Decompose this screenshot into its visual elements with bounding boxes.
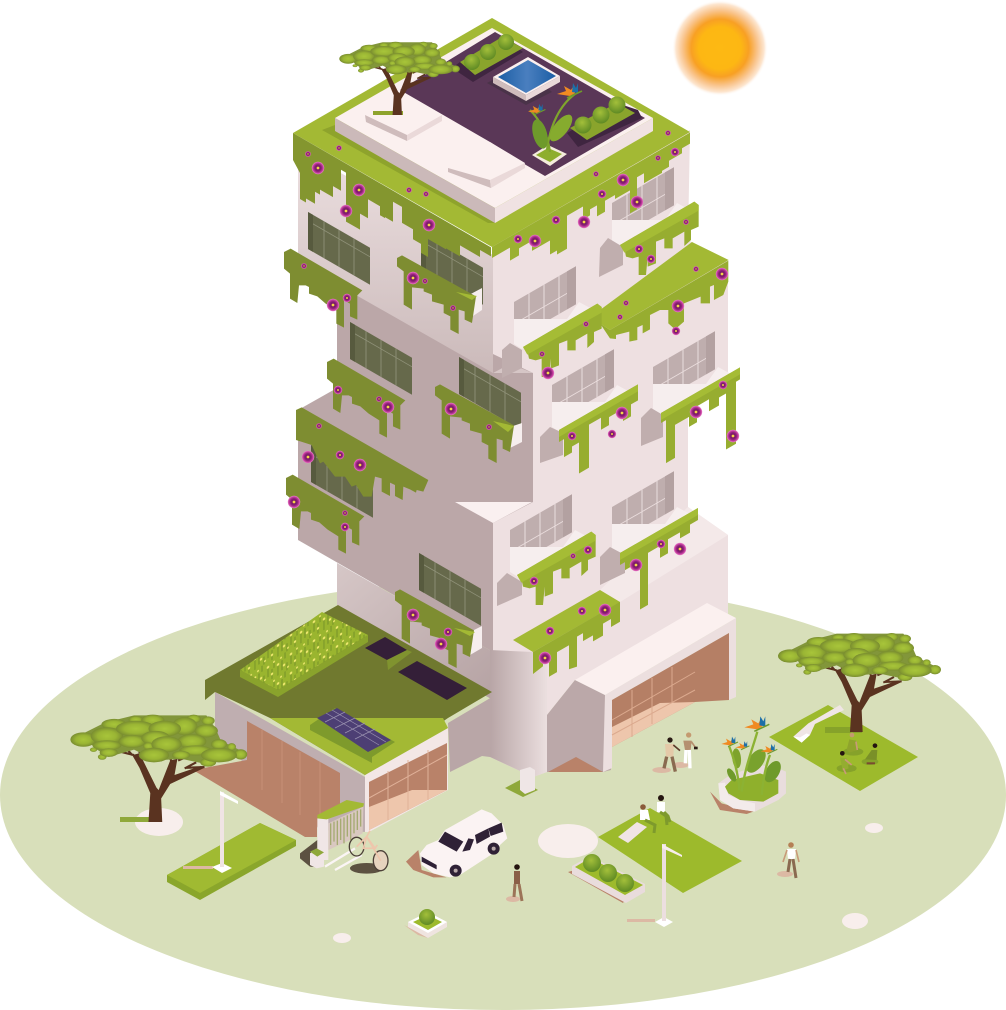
seated pair on central lawn <box>640 795 670 833</box>
right windows and balcony floors <box>510 167 733 577</box>
base wall <box>490 640 547 777</box>
annex brown glass and ground shadow <box>193 721 340 837</box>
roof left drape <box>293 133 491 309</box>
roof green surface <box>293 18 690 247</box>
garage floor <box>612 702 695 747</box>
green drapes left side <box>284 249 514 668</box>
low ledge drape <box>533 602 620 692</box>
garage entrance triangle <box>548 757 603 772</box>
balcony side walls <box>497 238 663 606</box>
right walls of the tower <box>490 130 728 777</box>
left wall top tier <box>298 150 493 373</box>
garage side wall <box>547 680 611 772</box>
roof bird of paradise plant <box>528 83 582 166</box>
bike rack with green wall <box>300 800 364 870</box>
round planter with bird of paradise <box>710 716 786 814</box>
roof planter back <box>452 34 523 82</box>
bright drape ends <box>456 292 477 300</box>
paved circles <box>333 823 883 943</box>
kiosk <box>505 767 538 797</box>
lower ledge top <box>600 507 728 602</box>
annex building <box>193 605 492 837</box>
garage roof <box>575 603 736 695</box>
group on right lawn <box>837 733 878 774</box>
annex roof dark <box>205 605 492 775</box>
bicycle <box>349 831 388 874</box>
bench on right lawn <box>793 705 844 743</box>
solar panel <box>310 708 395 763</box>
garage right frame <box>603 618 736 772</box>
annex gap wall <box>448 697 492 772</box>
walker left <box>506 864 522 902</box>
annex front face <box>365 728 448 832</box>
raised white box left <box>365 92 442 141</box>
green drapes right side <box>513 202 740 692</box>
left tree <box>70 715 247 836</box>
magenta flowers <box>288 130 739 664</box>
people <box>506 732 878 902</box>
lower balcony drape with long drip <box>620 508 698 621</box>
sun <box>672 0 768 96</box>
raised white box right <box>448 142 525 188</box>
garage glazing <box>612 633 729 747</box>
couple walking <box>652 732 698 773</box>
lamp post <box>627 844 682 927</box>
left wall lower tier <box>337 563 493 700</box>
bench on central lawn <box>618 822 647 843</box>
upper terrace drape and green top <box>600 242 729 342</box>
annex front glazing <box>369 743 447 830</box>
annex roof bright <box>270 718 448 775</box>
roof tree <box>339 42 460 115</box>
small planter <box>404 909 447 938</box>
balcony drape long drips <box>559 384 638 485</box>
central lawn <box>598 808 742 893</box>
lawn strip with lamp <box>167 791 296 900</box>
white balcony end blocks <box>467 288 522 655</box>
car <box>406 809 507 877</box>
roof right drape <box>492 133 690 293</box>
ground ellipse <box>0 580 1006 1010</box>
terrace top triangle <box>455 502 532 523</box>
tower <box>298 130 733 777</box>
purple roof deck <box>400 32 645 176</box>
underside step of top tier <box>493 364 533 373</box>
right tree <box>778 633 941 733</box>
right balcony drape with long drips <box>661 367 740 487</box>
right tree lawn <box>769 705 918 791</box>
annex left wall <box>215 692 367 832</box>
roof <box>293 18 690 309</box>
walker right <box>777 842 799 878</box>
left wall tiers two and three <box>298 280 533 652</box>
right garage box <box>547 603 736 772</box>
left windows <box>308 212 521 626</box>
grass bed <box>240 612 368 697</box>
hedge planter <box>568 854 645 903</box>
shadow band beside slab <box>322 125 495 223</box>
low ledge green top <box>513 590 620 652</box>
large left drape <box>296 407 428 500</box>
skylights <box>365 637 467 700</box>
white roof slab <box>335 28 653 208</box>
pool <box>487 57 560 105</box>
roof planter front <box>567 96 642 147</box>
